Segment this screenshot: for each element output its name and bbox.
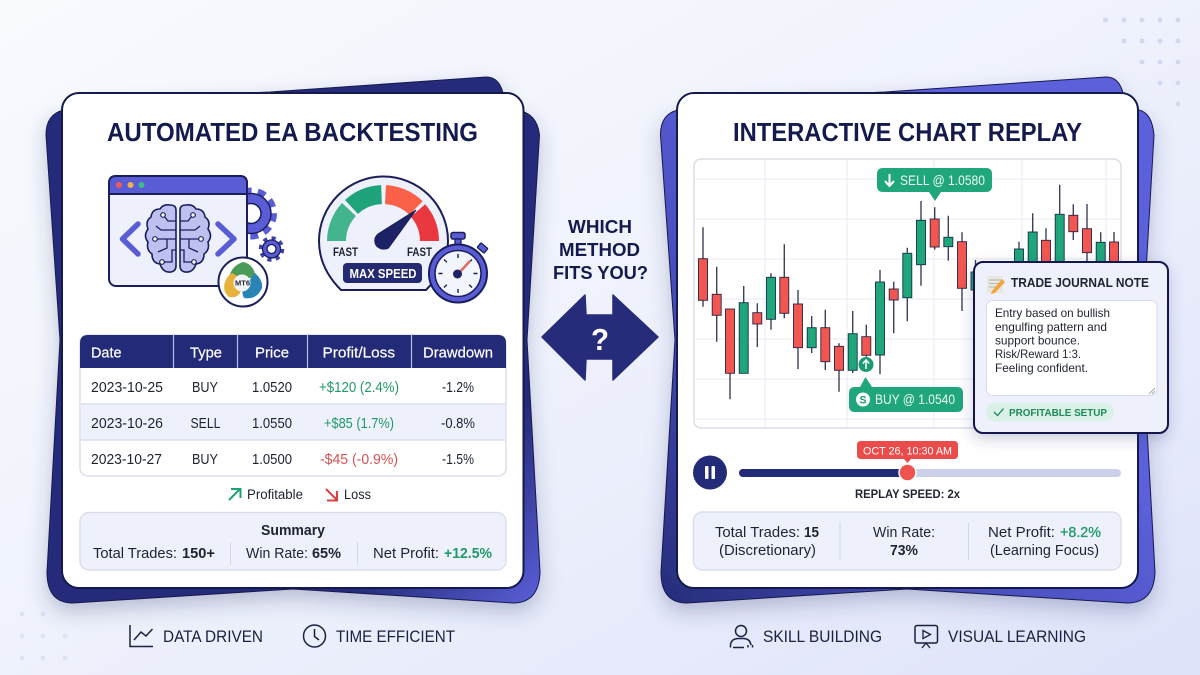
status pill bbox=[986, 402, 1114, 422]
note text area: Risk/Reward 1:3. bbox=[995, 347, 1081, 361]
status pill: PROFITABLE SETUP bbox=[1009, 407, 1107, 419]
note title: TRADE JOURNAL NOTE bbox=[1011, 276, 1149, 290]
panel: automated EA backtesting bbox=[46, 77, 540, 603]
summary box: +12.5% bbox=[444, 546, 492, 562]
note text area: support bounce. bbox=[995, 334, 1080, 348]
table: trade results: SELL bbox=[190, 416, 220, 432]
decorative dots top right bbox=[1103, 18, 1180, 106]
feature: data driven: DATA DRIVEN bbox=[163, 628, 263, 646]
note text area: Entry based on bullish bbox=[995, 306, 1110, 320]
callout: sell bbox=[877, 168, 992, 201]
table alternating row bbox=[81, 404, 505, 440]
table: trade results: -1.5% bbox=[442, 452, 474, 468]
heading: INTERACTIVE CHART REPLAY bbox=[733, 117, 1082, 147]
feature: skill building: SKILL BUILDING bbox=[763, 628, 882, 646]
feature: data driven bbox=[130, 625, 263, 646]
table: trade results: BUY bbox=[192, 380, 218, 396]
summary box: Total Trades: bbox=[93, 546, 177, 562]
question mark: ? bbox=[591, 322, 609, 357]
stats box: 73% bbox=[890, 543, 918, 559]
icon: code window with brain bbox=[109, 176, 247, 286]
table rows: 2023-10-25 bbox=[91, 380, 163, 396]
table: trade results: 2023-10-27 bbox=[91, 452, 162, 468]
table: trade results: -1.2% bbox=[442, 380, 474, 396]
callout: buy: BUY @ 1.0540 bbox=[875, 392, 955, 407]
stats box: Total Trades: bbox=[715, 525, 800, 541]
feature: skill building bbox=[730, 626, 882, 648]
replay controls bbox=[693, 441, 1121, 501]
time tooltip: OCT 26, 10:30 AM bbox=[863, 446, 952, 458]
table: trade results: 2023-10-26 bbox=[91, 416, 163, 432]
table: trade results: Profit/Loss bbox=[322, 346, 395, 362]
table header bbox=[80, 335, 506, 368]
table: trade results: -$45 (-0.9%) bbox=[320, 452, 398, 468]
table: trade results: -0.8% bbox=[441, 416, 475, 432]
center question: METHOD bbox=[559, 240, 640, 260]
table: trade results: BUY bbox=[192, 452, 218, 468]
double arrow bbox=[542, 295, 658, 380]
table: trade results: +$85 (1.7%) bbox=[324, 416, 394, 432]
icon: speedometer gauge: MAX SPEED bbox=[350, 266, 416, 281]
feature: time efficient bbox=[304, 625, 455, 647]
summary box: 65% bbox=[312, 546, 341, 562]
icon: speedometer gauge: FAST bbox=[407, 247, 432, 259]
table: trade results: Date bbox=[91, 346, 122, 362]
table: trade results: 1.0550 bbox=[252, 416, 292, 432]
panel backing shape bbox=[660, 77, 1155, 603]
decorative dots bottom left bbox=[20, 612, 68, 660]
stats box: (Learning Focus) bbox=[990, 543, 1099, 559]
note text area: Feeling confident. bbox=[995, 361, 1088, 375]
time tooltip bbox=[857, 441, 958, 463]
icon: MT6 badge: MT6 bbox=[235, 280, 250, 288]
callout: buy: S bbox=[860, 394, 866, 406]
panel: interactive chart replay bbox=[660, 77, 1168, 603]
summary box: Summary bbox=[261, 523, 325, 539]
feature: visual learning bbox=[915, 626, 1086, 648]
feature: time efficient: TIME EFFICIENT bbox=[336, 628, 455, 646]
center question bbox=[542, 217, 658, 380]
heading: AUTOMATED EA BACKTESTING bbox=[107, 117, 478, 147]
feature: visual learning: VISUAL LEARNING bbox=[948, 628, 1086, 646]
note text area bbox=[986, 300, 1157, 396]
table: trade results bbox=[80, 335, 506, 476]
question heading: WHICH bbox=[568, 217, 632, 237]
progress track bbox=[739, 469, 1121, 477]
table: trade results: Type bbox=[190, 346, 222, 362]
stats box: +8.2% bbox=[1060, 525, 1101, 541]
icon: speedometer gauge bbox=[319, 176, 448, 290]
legend bbox=[229, 487, 371, 502]
panel backing shape bbox=[46, 77, 540, 603]
gauge labels: FAST bbox=[333, 247, 358, 259]
stats box: Win Rate: bbox=[873, 525, 935, 541]
stats box: (Discretionary) bbox=[719, 543, 816, 559]
trade journal note bbox=[974, 262, 1168, 433]
table: trade results: 1.0520 bbox=[252, 380, 292, 396]
summary box: Net Profit: bbox=[373, 546, 439, 562]
callout: buy bbox=[849, 357, 963, 412]
summary box: Win Rate: bbox=[246, 546, 308, 562]
table: trade results: Price bbox=[255, 346, 289, 362]
legend: Profitable bbox=[247, 487, 303, 502]
replay speed: REPLAY SPEED: 2x bbox=[855, 487, 960, 501]
stats box bbox=[694, 512, 1121, 570]
white card bbox=[62, 93, 524, 588]
table: trade results: Drawdown bbox=[423, 346, 493, 362]
stats box: 15 bbox=[804, 525, 819, 541]
icon: gears bbox=[228, 190, 282, 260]
icon: MT6 badge bbox=[218, 258, 268, 306]
table: trade results: +$120 (2.4%) bbox=[319, 380, 399, 396]
table: trade results: 1.0500 bbox=[252, 452, 292, 468]
summary box: 150+ bbox=[182, 546, 215, 562]
callout: sell: SELL @ 1.0580 bbox=[900, 173, 985, 188]
legend: Loss bbox=[344, 487, 371, 502]
icon: memo and pencil bbox=[987, 276, 1005, 294]
gauge needle bbox=[375, 210, 416, 249]
icon: stopwatch bbox=[429, 232, 488, 302]
summary box bbox=[80, 512, 506, 570]
pause button bbox=[693, 456, 727, 490]
candles bbox=[698, 185, 1118, 399]
center question: FITS YOU? bbox=[553, 263, 648, 283]
candlestick chart bbox=[694, 159, 1121, 428]
note text area: engulfing pattern and bbox=[995, 320, 1107, 334]
white card bbox=[677, 93, 1138, 588]
stats box: Net Profit: bbox=[988, 525, 1055, 541]
